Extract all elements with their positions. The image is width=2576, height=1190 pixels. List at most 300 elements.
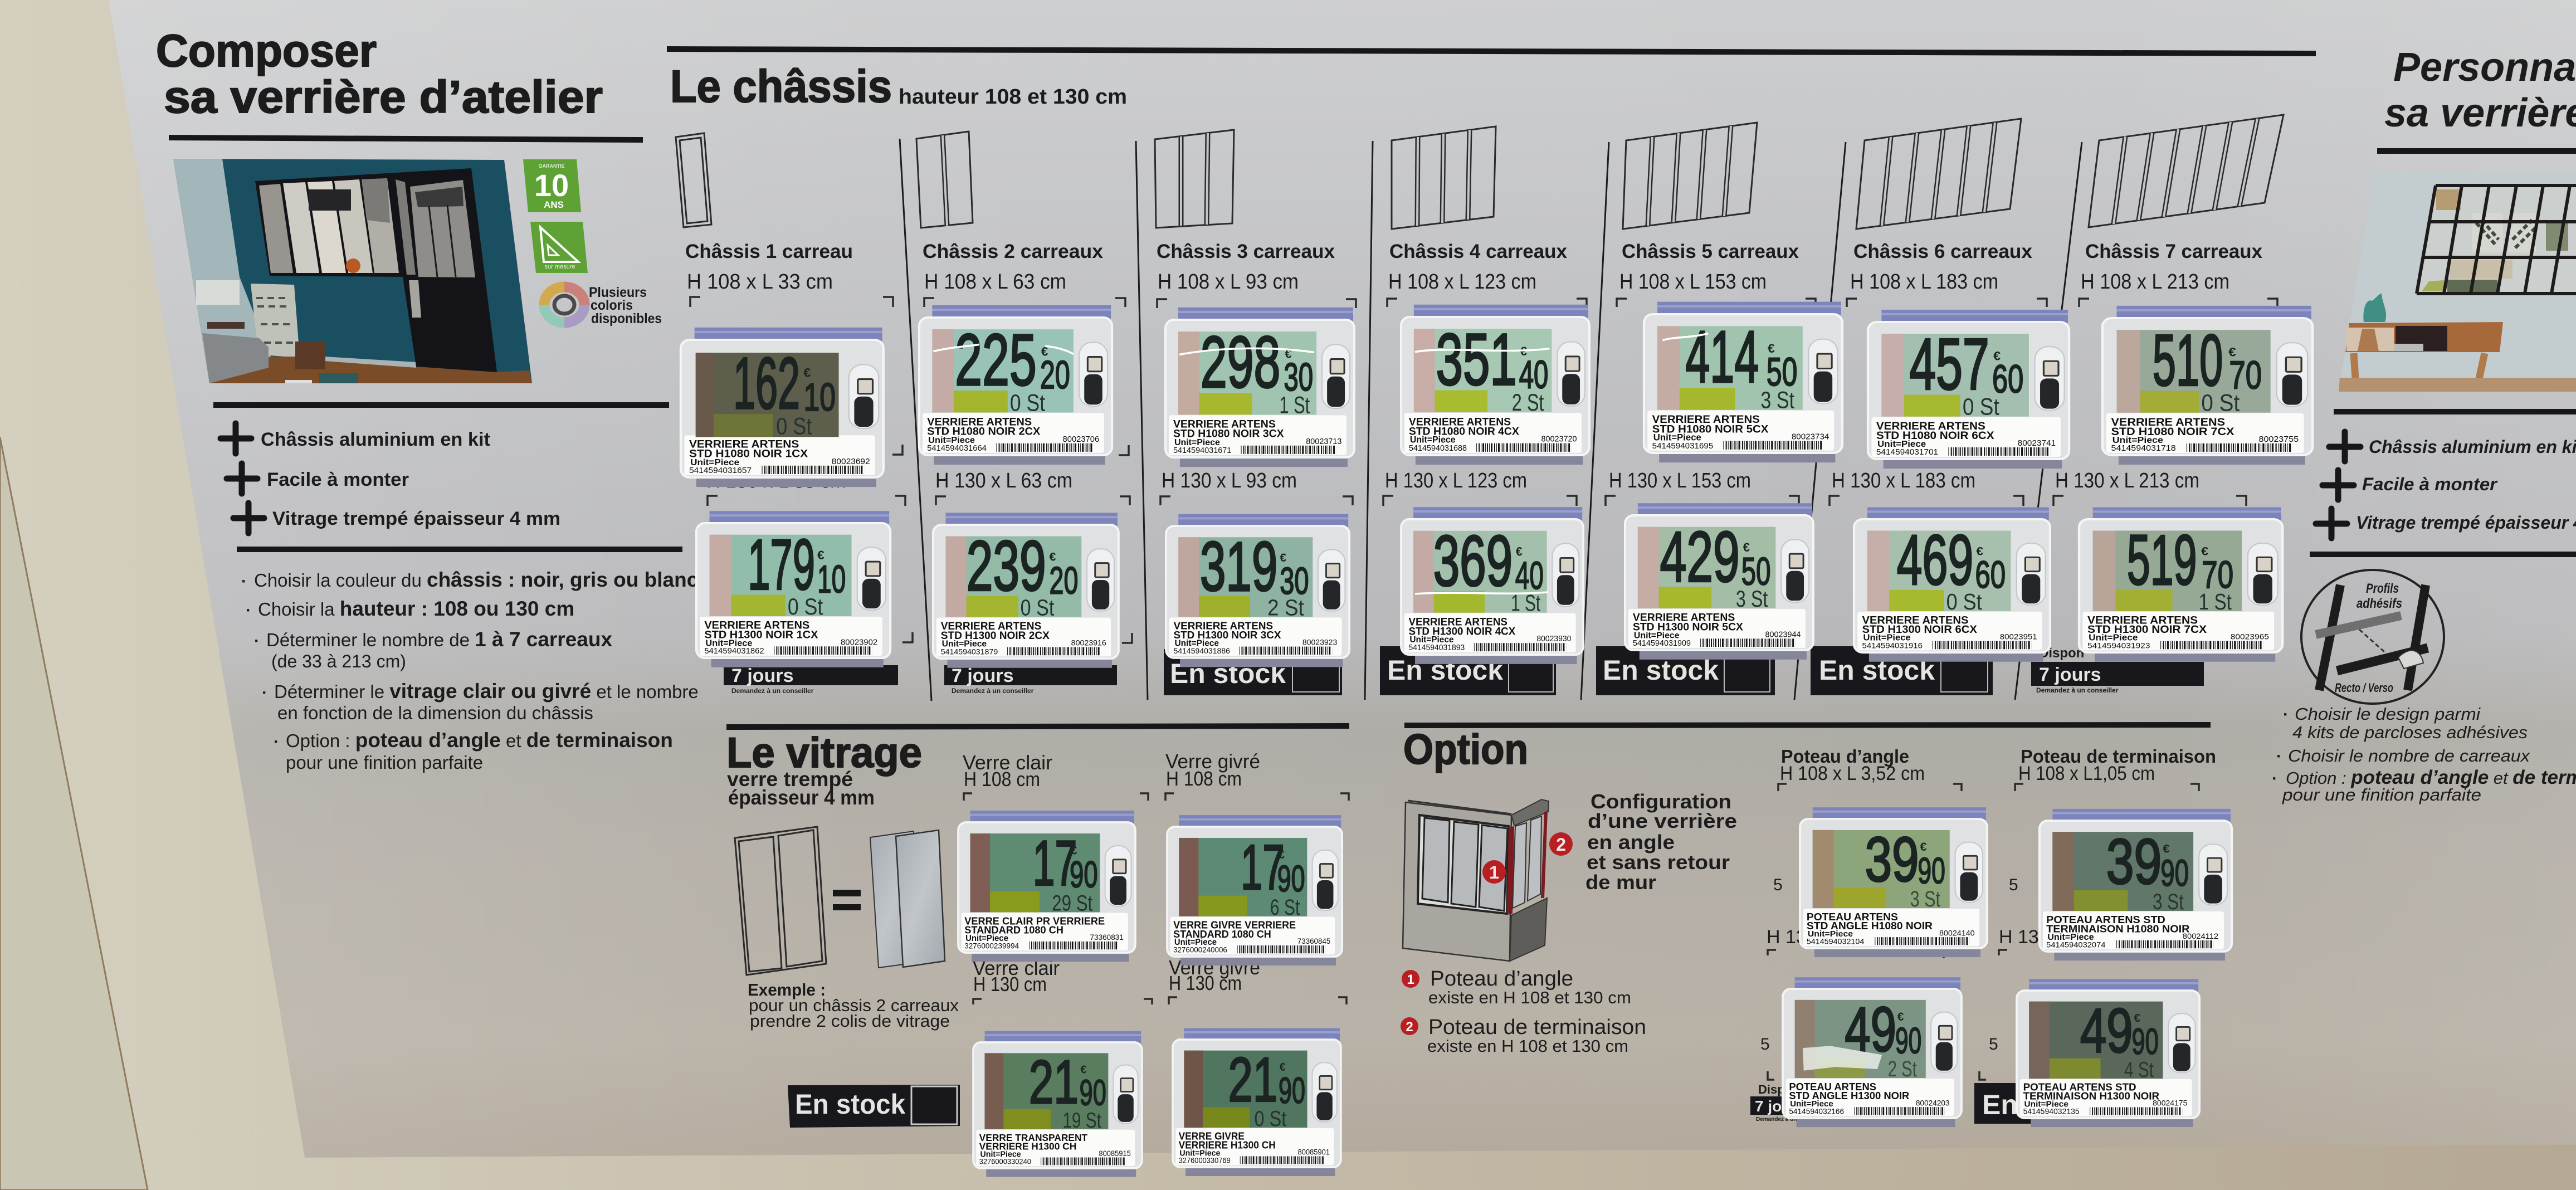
price tag: poteau d'angle H130: 49 — [1845, 994, 1896, 1065]
legend: poteau d'angle: existe en H 108 et 130 cm — [1428, 988, 1631, 1007]
tag: 7 jours column 7 — [2031, 646, 2204, 694]
price tag: poteau de terminaison H108 — [2040, 809, 2232, 960]
price tag: poteau d'angle H108: POTEAU ARTENS — [1807, 911, 1898, 923]
benefits list: Vitrage trempé épaisseur 4 mm — [272, 508, 560, 529]
price tag: châssis 5 carreaux H108: STD H1080 NOIR 5CX — [1652, 423, 1769, 435]
dimensions H 108: H 108 x L 93 cm — [1158, 270, 1299, 294]
price tag: châssis 1 carreau H108: € — [803, 365, 811, 379]
price tag: poteau d'angle H108 — [1800, 807, 1987, 957]
dimensions H 108: H 108 x L 153 cm — [1619, 270, 1767, 294]
price tag: châssis 2 carreaux H130: € — [1050, 550, 1056, 564]
price tag: verre clair H108: 73360831 — [1090, 933, 1124, 942]
panel: composer sa verrière — [156, 26, 699, 773]
tag: en stock: En stock — [795, 1089, 905, 1120]
price tag: châssis 1 carreau H130: VERRIERE ARTENS — [704, 620, 809, 632]
price tag: châssis 3 carreaux H130: € — [1280, 551, 1286, 564]
heading: le châssis: hauteur 108 et 130 cm — [899, 85, 1127, 109]
price tag: verre clair H108: 29 St — [1052, 891, 1092, 916]
tag: en stock column 4: En stock — [1387, 655, 1503, 686]
price tag: châssis 4 carreaux H108 — [1401, 305, 1589, 465]
dimensions H 108: H 108 x L 123 cm — [1388, 270, 1536, 294]
price tag: châssis 7 carreaux H108: STD H1080 NOIR 7CX — [2111, 426, 2235, 438]
price tag: châssis 5 carreaux H130: Unit=Piece — [1634, 631, 1680, 640]
tag: 7 jours partial — [1750, 1082, 1824, 1123]
price tag: châssis 6 carreaux H108: STD H1080 NOIR 6CX — [1876, 430, 1994, 442]
price tag: verre clair H130: VERRIERE H1300 CH — [979, 1140, 1076, 1152]
price tag: châssis 4 carreaux H108: 80023720 — [1541, 435, 1577, 444]
example text: pour un châssis 2 carreaux — [749, 996, 959, 1015]
price tag: châssis 6 carreaux H108: 0 St — [1963, 394, 1999, 420]
price tag: châssis 7 carreaux H108: Unit=Piece — [2112, 435, 2163, 445]
price tag: châssis 2 carreaux H130: Unit=Piece — [942, 640, 987, 649]
instructions list: Option : poteau d’angle et de terminaison — [286, 729, 673, 752]
price tag: châssis 4 carreaux H130: 5414594031893 — [1408, 643, 1465, 652]
benefits list: Châssis aluminium en kit — [261, 429, 490, 450]
instructions list: · — [274, 733, 279, 751]
price tag: verre givré H130: 80085901 — [1298, 1148, 1330, 1157]
tag: en stock column 3 — [1164, 649, 1342, 695]
wall edge at left — [0, 437, 148, 1190]
price tag: verre givré H108: Unit=Piece — [1174, 938, 1217, 947]
price tag: châssis 4 carreaux H108: 351 — [1436, 318, 1517, 401]
price tag: châssis 3 carreaux H108: € — [1285, 347, 1292, 361]
badge: garantie 10 ans: 10 — [534, 168, 569, 203]
example text: prendre 2 colis de vitrage — [750, 1011, 950, 1031]
column titles: Châssis 3 carreaux — [1157, 241, 1335, 262]
title: personnaliser — [2384, 45, 2576, 135]
price tag: poteau d'angle H108: 5414594032104 — [1807, 937, 1865, 945]
legend: poteau de terminaison: Poteau de terminaison — [1428, 1016, 1646, 1039]
legend: poteau d'angle — [1402, 967, 1631, 1007]
icon: window 3 panes — [1155, 130, 1234, 228]
tag: en stock partial: En — [1982, 1089, 2018, 1120]
price tag: châssis 6 carreaux H108 — [1868, 310, 2069, 469]
price tag: poteau d'angle H130: STD ANGLE H1300 NOIR — [1789, 1090, 1909, 1101]
price tag: poteau d'angle H108: 39 — [1865, 824, 1919, 895]
price tag: châssis 3 carreaux H108: Unit=Piece — [1174, 437, 1220, 447]
panel: le châssis — [667, 49, 2316, 701]
panel: option — [1401, 725, 2216, 1124]
price tag: verre givré H108: 3276000240006 — [1173, 945, 1227, 954]
price tag: verre clair H130: € — [1080, 1064, 1086, 1076]
price tag: châssis 3 carreaux H108: VERRIERE ARTENS — [1173, 418, 1276, 431]
price tag: châssis 3 carreaux H130: 2 St — [1267, 595, 1304, 621]
price tag: châssis 7 carreaux H130: VERRIERE ARTENS — [2087, 614, 2198, 626]
tag: 7 jours partial: 7 jo — [1755, 1098, 1782, 1115]
price tag: verre clair H130: 90 — [1080, 1074, 1106, 1113]
glass labels: Verre clair — [973, 957, 1060, 979]
tag: 7 jours column 7: Dispon — [2039, 646, 2084, 661]
tag: en stock column 4 — [1380, 646, 1556, 695]
price tag: châssis 1 carreau H130: € — [817, 549, 824, 562]
dimensions H 130: H 130 x L 63 cm — [935, 469, 1072, 492]
price tag: verre givré H108: STANDARD 1080 CH — [1173, 928, 1271, 940]
price tag: châssis 3 carreaux H108: 30 — [1284, 355, 1313, 399]
labels: poteau heads: Poteau d’angle — [1781, 746, 1909, 767]
badge: garantie 10 ans — [523, 159, 581, 212]
price tag: poteau d'angle H130 — [1783, 977, 1962, 1127]
price tag: châssis 3 carreaux H130: STD H1300 NOIR 3CX — [1174, 629, 1281, 641]
price tag: poteau de terminaison H108: 80024112 — [2183, 932, 2218, 941]
price tag: poteau d'angle H108: 3 St — [1910, 886, 1940, 911]
column titles: Châssis 7 carreaux — [2085, 241, 2263, 262]
price tag: poteau de terminaison H130 — [2017, 979, 2199, 1127]
panel: personnaliser sa verrière — [2272, 45, 2576, 804]
price tag: châssis 3 carreaux H108: STD H1080 NOIR 3CX — [1173, 428, 1284, 440]
diagram: window frame — [735, 827, 826, 975]
icon: colour wheel — [544, 287, 584, 323]
price tag: châssis 6 carreaux H108: € — [1993, 349, 2001, 363]
price tag: châssis 4 carreaux H108: 40 — [1519, 352, 1548, 397]
instructions list: · — [241, 572, 247, 591]
price tag: châssis 3 carreaux H108: 80023713 — [1306, 437, 1341, 446]
instructions list: pour une finition parfaite — [286, 752, 483, 773]
glass labels: Verre givré — [1169, 956, 1260, 979]
instructions list: · — [2283, 705, 2289, 724]
price tag: châssis 4 carreaux H130: Unit=Piece — [1409, 635, 1454, 645]
price tag: châssis 7 carreaux H130: € — [2201, 544, 2209, 558]
price tag: châssis 6 carreaux H108: 5414594031701 — [1876, 447, 1938, 457]
price tag: verre clair H108: Unit=Piece — [965, 934, 1008, 943]
price tag: châssis 4 carreaux H130 — [1401, 507, 1583, 664]
legend: poteau de terminaison: existe en H 108 et 130 cm — [1427, 1036, 1628, 1056]
price tag: poteau d'angle H108: Unit=Piece — [1808, 929, 1853, 939]
tag: en stock partial — [1974, 1083, 2141, 1124]
dimensions H 130: H 130 x L 153 cm — [1609, 469, 1751, 492]
price tag: poteau de terminaison H108: POTEAU ARTENS STD — [2046, 915, 2165, 926]
price tag: poteau d'angle H108: 90 — [1918, 851, 1945, 891]
tag: en stock column 5 — [1596, 646, 1775, 695]
diagram: corner installation — [1403, 799, 1549, 961]
instructions list: 4 kits de parcloses adhésives — [2292, 723, 2528, 742]
price tag: châssis 5 carreaux H108 — [1644, 302, 1842, 462]
text: configuration: en angle — [1587, 831, 1675, 854]
price tag: châssis 2 carreaux H130: 80023916 — [1071, 639, 1106, 648]
price tag: verre clair H108: 3276000239994 — [964, 942, 1019, 950]
dimensions H 130: H 130 x L 93 cm — [1162, 469, 1297, 492]
price tag: châssis 4 carreaux H130: € — [1516, 545, 1523, 559]
price tag: châssis 4 carreaux H130: 369 — [1433, 520, 1513, 601]
price tag: châssis 3 carreaux H130: 319 — [1200, 527, 1277, 606]
price tag: châssis 2 carreaux H108: VERRIERE ARTENS — [927, 416, 1032, 428]
price tag: châssis 2 carreaux H108: STD H1080 NOIR 2CX — [927, 426, 1040, 438]
price tag: châssis 5 carreaux H108: 50 — [1767, 350, 1797, 394]
icon: adhesive profiles: adhésifs — [2357, 596, 2402, 611]
price tag: châssis 2 carreaux H130: 0 St — [1021, 595, 1055, 621]
price tag: châssis 6 carreaux H108: 457 — [1909, 324, 1989, 405]
price tag: poteau de terminaison H130: 49 — [2080, 996, 2133, 1066]
price tag: verre givré H130: 90 — [1279, 1070, 1305, 1111]
price tag: verre givré H130 — [1173, 1028, 1341, 1176]
dimensions H 108: H 108 x L 33 cm — [687, 270, 833, 294]
icon: adhesive profiles: Recto / Verso — [2335, 681, 2393, 695]
example text — [748, 980, 959, 1031]
labels: poteau heads: H 108 x L 3,52 cm — [1780, 763, 1925, 784]
price tag: châssis 4 carreaux H108: Unit=Piece — [1410, 435, 1456, 445]
dimensions H 108: H 108 x L 183 cm — [1850, 270, 1998, 294]
benefits list — [2316, 432, 2576, 538]
price tag: châssis 5 carreaux H130 — [1625, 503, 1813, 660]
dimensions H 130 — [706, 469, 2199, 492]
icon: window 1 pane — [676, 133, 711, 227]
price tag: châssis 6 carreaux H108: VERRIERE ARTENS — [1876, 420, 1985, 432]
instructions list: en fonction de la dimension du châssis — [277, 703, 593, 723]
price tag: châssis 1 carreau H108: 5414594031657 — [689, 466, 752, 475]
instructions list: · — [2272, 769, 2277, 788]
price tag: châssis 1 carreau H108: 0 St — [776, 413, 812, 440]
text: configuration: de mur — [1585, 871, 1656, 894]
badge: sur mesure — [530, 222, 588, 273]
price tag: châssis 5 carreaux H130: 5414594031909 — [1633, 639, 1691, 648]
price tag: poteau de terminaison H108: 39 — [2106, 826, 2162, 898]
price tag: verre clair H130 — [973, 1031, 1142, 1177]
price tag: verre clair H108 — [958, 811, 1135, 962]
tag: 7 jours column 2: 7 jours — [952, 665, 1013, 686]
glass labels — [963, 750, 1260, 996]
icon: adhesive profiles: Profils — [2366, 581, 2399, 596]
price tag: châssis 3 carreaux H108: 298 — [1201, 321, 1280, 403]
badge: garantie 10 ans: GARANTIE — [538, 163, 565, 169]
price tag: verre clair H130: 3276000330240 — [979, 1157, 1031, 1166]
benefits list: Facile à monter — [2362, 474, 2498, 494]
price tag: poteau de terminaison H108: 5414594032074 — [2046, 941, 2105, 949]
instructions list: · — [2276, 747, 2282, 765]
price tag: châssis 4 carreaux H108: VERRIERE ARTENS — [1409, 416, 1511, 428]
badge: 2 on diagram: 2 — [1556, 835, 1566, 855]
price tag: châssis 2 carreaux H130: 5414594031879 — [941, 647, 998, 656]
price tag: châssis 5 carreaux H108: € — [1768, 341, 1775, 355]
price tag: châssis 2 carreaux H130 — [933, 513, 1119, 668]
price tag: châssis 1 carreau H108: STD H1080 NOIR 1CX — [689, 448, 808, 460]
price tag: verre givré H108: 6 St — [1270, 895, 1300, 920]
price tag: châssis 3 carreaux H130: 30 — [1280, 560, 1309, 602]
price tag: châssis 6 carreaux H108: 60 — [1992, 358, 2023, 401]
price tag: verre givré H130: € — [1280, 1061, 1286, 1074]
text: plusieurs coloris disponibles: Plusieurs — [589, 285, 647, 300]
benefits list: Facile à monter — [267, 469, 409, 490]
legend: poteau de terminaison — [1401, 1016, 1646, 1056]
price tag: châssis 7 carreaux H130: 70 — [2202, 554, 2233, 596]
price tag: châssis 7 carreaux H108: 0 St — [2201, 391, 2240, 416]
instructions list: Choisir le nombre de carreaux — [2288, 746, 2531, 765]
price tag: châssis 5 carreaux H130: 80023944 — [1765, 630, 1801, 639]
price tag: verre givré H130: 21 — [1228, 1045, 1277, 1115]
instructions list: Déterminer le vitrage clair ou givré et le nombre — [274, 680, 699, 703]
badge: garantie 10 ans: ANS — [544, 199, 564, 210]
labels: poteau heads: 5 — [1989, 1035, 1998, 1054]
price tag: poteau d'angle H130: 2 St — [1888, 1057, 1917, 1081]
icon: window 2 panes — [916, 131, 973, 228]
tag: en stock column 5: En stock — [1603, 655, 1719, 686]
badge: 2 on diagram — [1549, 832, 1573, 856]
price tag: châssis 5 carreaux H130: VERRIERE ARTENS — [1633, 612, 1735, 624]
price tag: châssis 7 carreaux H108: VERRIERE ARTENS — [2111, 416, 2225, 428]
instructions list: Choisir la hauteur : 108 ou 130 cm — [258, 597, 574, 620]
price tag: châssis 3 carreaux H130: 80023923 — [1302, 638, 1338, 647]
icon: window 7 panes — [2089, 115, 2284, 227]
heading: le vitrage: Le vitrage — [726, 729, 922, 777]
price tag: verre givré H108: 17 — [1241, 832, 1285, 903]
price tag: châssis 1 carreau H108: 80023692 — [832, 457, 870, 466]
icon: window 5 panes — [1623, 123, 1757, 229]
instructions list: Choisir le design parmi — [2295, 704, 2481, 724]
price tag: châssis 1 carreau H130 — [696, 511, 890, 667]
price tag: châssis 4 carreaux H130: 80023930 — [1536, 635, 1572, 643]
glass labels: Verre clair — [963, 751, 1052, 774]
labels: poteau heads: H 13 — [1767, 926, 1807, 948]
icon: window 4 panes — [1392, 126, 1496, 229]
price tag: poteau d'angle H130: POTEAU ARTENS — [1789, 1081, 1876, 1093]
price tag: châssis 5 carreaux H130: 50 — [1741, 550, 1770, 593]
price tag: poteau d'angle H108: 80024140 — [1939, 929, 1975, 937]
glass labels: Verre givré — [1165, 750, 1260, 773]
price tag: verre givré H108: 90 — [1277, 858, 1305, 899]
price tag: châssis 6 carreaux H108: Unit=Piece — [1877, 438, 1926, 449]
dimensions H 108: H 108 x L 213 cm — [2081, 270, 2229, 294]
legend: poteau d'angle: 1 — [1407, 972, 1414, 987]
price tag: châssis 2 carreaux H108: € — [1041, 345, 1048, 359]
price tag: châssis 3 carreaux H108: 1 St — [1279, 392, 1310, 418]
price tag: poteau d'angle H130: € — [1897, 1011, 1904, 1023]
price tag: châssis 6 carreaux H130: STD H1300 NOIR 6CX — [1862, 623, 1977, 636]
price tag: châssis 7 carreaux H108: 80023755 — [2259, 435, 2299, 444]
price tag: poteau de terminaison H108: € — [2163, 842, 2170, 855]
price tag: poteau de terminaison H130: € — [2134, 1012, 2141, 1025]
price tag: châssis 1 carreau H108: 162 — [733, 343, 800, 424]
price tag: verre givré H130: 3276000330769 — [1179, 1156, 1231, 1165]
dimensions H 108 — [687, 270, 2229, 294]
heading: le vitrage — [726, 729, 922, 809]
diagram: equals sign — [833, 890, 861, 910]
price tag: châssis 6 carreaux H130: € — [1976, 544, 1983, 558]
legend: poteau de terminaison: 2 — [1406, 1020, 1413, 1035]
price tag: verre clair H108: 90 — [1070, 854, 1098, 896]
labels: poteau heads: 5 — [1760, 1035, 1770, 1054]
price tag: châssis 4 carreaux H130: VERRIERE ARTENS — [1408, 616, 1507, 628]
instructions list: Déterminer le nombre de 1 à 7 carreaux — [266, 628, 612, 651]
price tag: poteau d'angle H130: Unit=Piece — [1790, 1099, 1833, 1109]
tag: en stock column 6 — [1811, 646, 1993, 695]
price tag: verre clair H108: STANDARD 1080 CH — [964, 924, 1063, 936]
price tag: châssis 7 carreaux H130: Unit=Piece — [2089, 633, 2138, 642]
tag: 7 jours column 1 — [724, 665, 898, 695]
heading: le châssis: Le châssis — [670, 61, 892, 112]
price tag: poteau d'angle H130: 90 — [1895, 1020, 1921, 1062]
price tag: châssis 4 carreaux H108: 2 St — [1512, 389, 1544, 416]
text: plusieurs coloris disponibles: coloris — [591, 298, 633, 313]
dimensions H 130: H 130 x L 213 cm — [2055, 469, 2199, 492]
price tag: verre givré H130: 0 St — [1255, 1106, 1287, 1131]
price tag: châssis 6 carreaux H108: 80023741 — [2018, 438, 2056, 448]
price tag: verre clair H130: 80085915 — [1099, 1149, 1131, 1158]
price tag: châssis 1 carreau H108 — [681, 328, 884, 487]
text: configuration — [1585, 790, 1737, 894]
price tag: châssis 7 carreaux H130: 80023965 — [2231, 633, 2269, 642]
price tag: verre clair H130: VERRE TRANSPARENT — [979, 1132, 1087, 1143]
glass labels: H 130 cm — [973, 973, 1047, 996]
price tag: châssis 5 carreaux H108: 5414594031695 — [1652, 441, 1713, 451]
price tag: poteau d'angle H130: 80024203 — [1916, 1099, 1950, 1107]
price tag: châssis 1 carreau H108: 10 — [803, 375, 836, 420]
glass labels: H 108 cm — [1166, 767, 1242, 790]
price tag: châssis 7 carreaux H130: 519 — [2127, 521, 2197, 600]
price tag: châssis 4 carreaux H130: 40 — [1515, 554, 1544, 597]
heading: le vitrage: verre trempé — [727, 768, 853, 791]
heading: le vitrage: épaisseur 4 mm — [728, 786, 875, 809]
price tag: châssis 7 carreaux H108: 70 — [2229, 353, 2262, 397]
glass labels: H 108 cm — [964, 768, 1040, 791]
price tag: verre clair H130: 21 — [1029, 1048, 1079, 1116]
price tag: châssis 6 carreaux H130: 60 — [1975, 553, 2006, 596]
price tag: châssis 2 carreaux H130: VERRIERE ARTENS — [941, 621, 1041, 632]
price tag: châssis 7 carreaux H130: 1 St — [2199, 589, 2232, 615]
price tag: châssis 5 carreaux H130: 3 St — [1736, 586, 1768, 612]
price tag: châssis 6 carreaux H130 — [1854, 508, 2050, 662]
price tag: châssis 7 carreaux H130: STD H1300 NOIR 7CX — [2087, 624, 2207, 636]
photo: grid window and sideboard — [2339, 172, 2576, 392]
price tag: châssis 7 carreaux H130: 5414594031923 — [2087, 642, 2150, 650]
tag: 7 jours partial: Demandez à un conseiller — [1756, 1116, 1824, 1123]
price tag: châssis 4 carreaux H130: STD H1300 NOIR 4CX — [1408, 626, 1516, 637]
price tag: poteau de terminaison H130: 4 St — [2124, 1058, 2154, 1082]
price tag: châssis 5 carreaux H130: € — [1743, 540, 1750, 554]
price tag: verre givré H108 — [1167, 815, 1342, 965]
column titles: Châssis 2 carreaux — [923, 241, 1104, 262]
glass labels: H 130 cm — [1169, 972, 1242, 994]
badge: 1 on diagram — [1482, 860, 1506, 884]
instructions list: · — [254, 632, 260, 650]
text: plusieurs coloris disponibles — [589, 285, 662, 326]
price tag: châssis 4 carreaux H108: STD H1080 NOIR 4CX — [1409, 425, 1519, 438]
text: configuration: et sans retour — [1587, 851, 1730, 874]
price tag: châssis 3 carreaux H108: 5414594031671 — [1173, 446, 1231, 455]
tag: 7 jours partial: Disp — [1758, 1082, 1785, 1096]
price tag: châssis 5 carreaux H130: 429 — [1660, 517, 1740, 597]
price tag: verre givré H130: Unit=Piece — [1179, 1149, 1220, 1158]
price tag: châssis 2 carreaux H108 — [919, 305, 1112, 465]
price tag: châssis 2 carreaux H108: 0 St — [1010, 390, 1045, 416]
price tag: châssis 7 carreaux H108: € — [2228, 345, 2236, 359]
price tag: châssis 7 carreaux H108: 5414594031718 — [2111, 444, 2176, 453]
instructions list — [241, 568, 699, 773]
tag: 7 jours column 7: 7 jours — [2039, 664, 2101, 685]
price tag: châssis 1 carreau H130: 80023902 — [841, 638, 877, 647]
price tag: verre clair H108: 17 — [1033, 828, 1077, 899]
tag: en stock — [788, 1085, 960, 1128]
price tag: châssis 4 carreaux H108: € — [1520, 344, 1527, 358]
tag: 7 jours column 2 — [944, 665, 1117, 695]
price tag: verre givré H130: VERRIERE H1300 CH — [1179, 1139, 1276, 1151]
price tag: verre clair H108: VERRE CLAIR PR VERRIERE — [964, 915, 1105, 926]
price tag: châssis 5 carreaux H108: VERRIERE ARTENS — [1652, 413, 1760, 426]
icon: window 6 panes — [1856, 119, 2021, 229]
labels: poteau heads: 5 — [2009, 876, 2018, 894]
shelf-tag corner brackets — [690, 297, 2277, 643]
instructions list: Choisir la couleur du châssis : noir, gris ou blanc — [254, 568, 698, 591]
price tag: châssis 6 carreaux H130: Unit=Piece — [1863, 633, 1911, 643]
instructions list: · — [246, 601, 251, 620]
benefits list — [221, 423, 560, 533]
price tag: châssis 1 carreau H108: Unit=Piece — [690, 457, 739, 467]
column titles: Châssis 4 carreaux — [1389, 241, 1568, 262]
price tag: châssis 4 carreaux H130: 1 St — [1511, 590, 1541, 616]
price tag: châssis 1 carreau H130: 10 — [817, 558, 846, 601]
price tag: châssis 3 carreaux H130: 5414594031886 — [1174, 646, 1230, 655]
price tag: châssis 1 carreau H130: 0 St — [788, 594, 823, 620]
price tag: poteau de terminaison H108: TERMINAISON H1080 NOIR — [2046, 924, 2190, 935]
price tag: châssis 3 carreaux H130 — [1166, 514, 1349, 667]
column titles — [685, 241, 2263, 262]
